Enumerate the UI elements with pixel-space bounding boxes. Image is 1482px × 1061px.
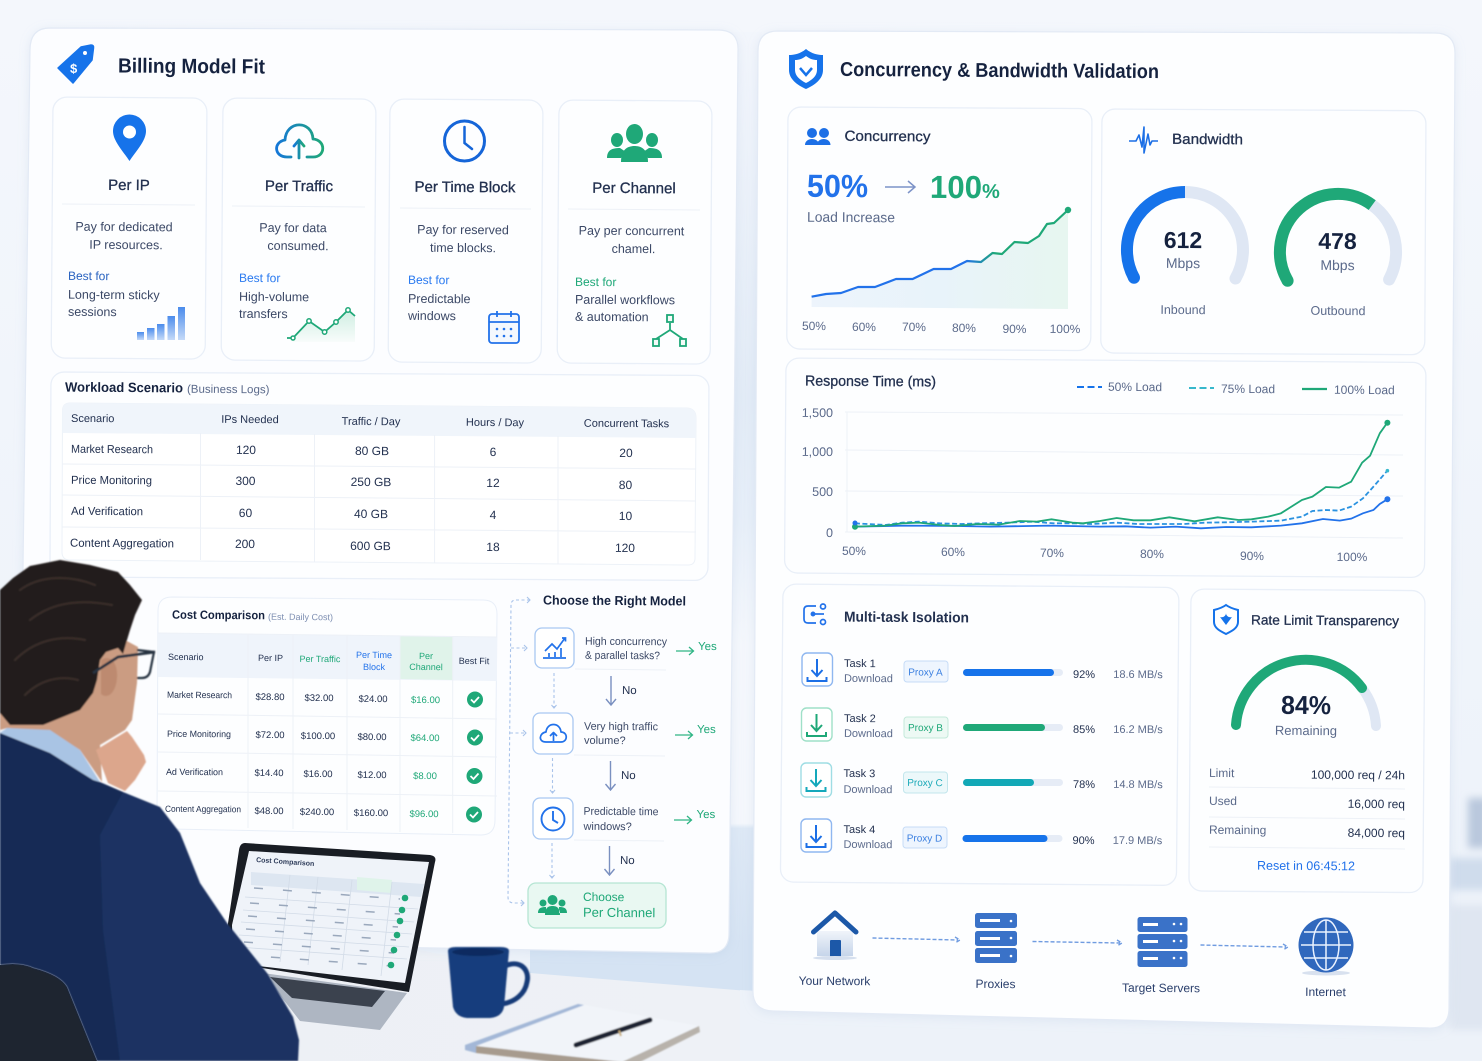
flowchart: choose the right model <box>508 593 717 928</box>
table: workload: 300 <box>235 474 256 488</box>
card: per channel: chamel. <box>612 242 655 256</box>
rate limit stats: Remaining <box>1209 823 1266 837</box>
rate limit stats <box>1209 766 1405 873</box>
row: task 3: Task 3 <box>843 768 875 780</box>
arrow <box>885 181 915 193</box>
step 2: volume? <box>584 735 626 747</box>
panel: cost comparison: $32.00 <box>304 693 334 704</box>
gauge: inbound <box>1127 192 1243 284</box>
card: per traffic <box>221 98 376 361</box>
step 1: Yes <box>698 641 717 653</box>
panel: cost comparison: $160.00 <box>354 808 388 819</box>
row: task 1 <box>802 653 1163 686</box>
panel: cost comparison: Best Fit <box>459 656 490 666</box>
card: per time block <box>388 99 543 363</box>
row: task 1: Proxy A <box>908 667 943 679</box>
panel: cost comparison: $100.00 <box>301 731 335 742</box>
card: per time block: windows <box>407 309 456 323</box>
panel: cost comparison: Per IP <box>258 653 283 663</box>
line chart: load increase: 60% <box>852 320 876 334</box>
axes <box>802 406 1403 564</box>
card: per traffic: Per Traffic <box>265 178 334 195</box>
card: rate limit transparency: Remaining <box>1275 723 1337 738</box>
table: workload: 200 <box>235 537 255 551</box>
panel: cost comparison: $72.00 <box>255 730 285 741</box>
panel: cost comparison: Block <box>363 662 386 672</box>
axes: 80% <box>1140 547 1164 561</box>
row: task 3: Download <box>843 784 892 796</box>
card: multi-task isolation: Multi-task Isolation <box>844 610 969 626</box>
rate limit stats: 100,000 req / 24h <box>1311 768 1405 782</box>
row: task 4 <box>801 819 1163 852</box>
rate limit stats: Reset in 06:45:12 <box>1257 859 1355 873</box>
network path diagram: Proxies <box>975 977 1016 991</box>
flowchart: choose the right model: No <box>621 770 636 782</box>
icon: house <box>813 913 857 960</box>
panel: cost comparison: $240.00 <box>300 807 334 818</box>
photo: notebook and pen <box>465 1004 700 1061</box>
panel: cost comparison: Cost Comparison <box>172 608 265 622</box>
axes: 60% <box>941 545 965 559</box>
step 1: & parallel tasks? <box>585 650 660 662</box>
axes: 70% <box>1040 546 1064 560</box>
step 3 <box>533 798 716 841</box>
blurred office backdrop <box>1450 798 1482 1030</box>
axes: 1,000 <box>802 445 833 459</box>
icon: isolation <box>804 604 826 624</box>
result: choose per channel: Choose <box>583 890 625 904</box>
icon: price tag: $ <box>70 61 78 76</box>
panel: billing model fit <box>0 28 738 953</box>
icon: globe <box>1298 918 1354 976</box>
card: bandwidth: Mbps <box>1320 257 1355 273</box>
icon: network branch <box>653 315 686 346</box>
card: bandwidth: Inbound <box>1160 303 1206 317</box>
card: rate limit transparency: 84% <box>1281 690 1331 720</box>
panel: cost comparison: Per Traffic <box>300 654 341 664</box>
photo: man <box>0 560 299 1061</box>
line chart: load increase: 70% <box>902 320 926 334</box>
row: task 3 <box>801 763 1163 797</box>
card: concurrency <box>787 107 1092 351</box>
gauge: outbound <box>1280 194 1396 287</box>
card: bandwidth: 612 <box>1164 227 1202 253</box>
panel: cost comparison: $8.00 <box>413 771 437 782</box>
card: bandwidth: 478 <box>1318 228 1357 254</box>
line chart: load increase: 90% <box>1002 322 1027 336</box>
card: rate limit transparency <box>1189 589 1425 893</box>
table: workload: 80 GB <box>355 444 389 458</box>
table: workload: 120 <box>615 541 635 555</box>
row: task 4: 17.9 MB/s <box>1113 835 1163 847</box>
card: bandwidth <box>1101 109 1426 355</box>
flowchart: choose the right model: No <box>622 685 637 697</box>
table: workload: Concurrent Tasks <box>584 418 670 430</box>
network path diagram: Internet <box>1305 985 1347 999</box>
rate limit stats: 16,000 req <box>1348 797 1405 811</box>
step 2: Yes <box>697 724 716 736</box>
heading: billing model fit: Billing Model Fit <box>118 54 265 79</box>
axes: 1,500 <box>802 406 833 420</box>
icon: calendar <box>489 311 519 343</box>
row: task 4: Task 4 <box>843 824 875 836</box>
icon: best fit checks <box>466 692 483 822</box>
icon: waveform <box>1129 127 1158 153</box>
card: per channel: & automation <box>575 310 649 324</box>
axes: 0 <box>826 526 833 540</box>
row: task 3: 78% <box>1073 779 1095 791</box>
row: task 2 <box>802 708 1163 741</box>
panel: cost comparison: Scenario <box>168 652 204 662</box>
row: task 1: 92% <box>1073 669 1095 681</box>
icon: users <box>805 128 830 145</box>
card: per ip: Per IP <box>108 177 150 194</box>
panel: cost comparison: $16.00 <box>303 769 333 780</box>
card: per ip: Pay for dedicated <box>75 220 173 234</box>
panel: cost comparison: Content Aggregation <box>165 804 241 814</box>
legend: 50% Load <box>1108 380 1162 394</box>
card: concurrency: % <box>982 181 1000 203</box>
network path diagram: Target Servers <box>1122 981 1200 995</box>
icon: cloud upload <box>277 125 323 158</box>
panel: cost comparison: (Est. Daily Cost) <box>268 612 333 622</box>
dashed return path <box>508 600 554 903</box>
icon: signal bars <box>137 307 185 340</box>
legend <box>1077 380 1395 397</box>
axes: 90% <box>1240 549 1264 563</box>
rate limit stats: Used <box>1209 794 1237 808</box>
icon: price tag <box>58 45 94 83</box>
axes: 500 <box>812 485 833 499</box>
photo: laptop <box>227 843 435 1030</box>
step 1 <box>535 628 717 670</box>
card: concurrency: 100 <box>930 169 982 205</box>
legend: 75% Load <box>1221 382 1275 396</box>
table: workload: 12 <box>486 476 500 490</box>
panel: workload scenario <box>50 372 709 580</box>
table: workload: 40 GB <box>354 507 388 521</box>
card: multi-task isolation <box>780 584 1179 885</box>
icon: clock <box>444 121 484 161</box>
icon: people group <box>607 124 662 162</box>
table: workload: 10 <box>619 509 633 523</box>
flowchart: choose the right model: Choose the Right Model <box>543 593 686 608</box>
table: workload: Hours / Day <box>466 417 525 429</box>
panel: cost comparison: $48.00 <box>254 806 284 817</box>
card: bandwidth: Outbound <box>1310 304 1366 318</box>
table: workload: IPs Needed <box>221 414 279 426</box>
row: task 2: Download <box>844 728 893 740</box>
icon: shield <box>789 49 823 89</box>
laptop screen text: Cost Comparison <box>256 857 315 868</box>
table: workload: 120 <box>236 443 256 457</box>
card: concurrency: Concurrency <box>844 129 931 145</box>
card: per ip: sessions <box>68 305 117 319</box>
table: workload <box>62 403 696 565</box>
line chart: load increase: 80% <box>952 321 976 335</box>
icon: shield check <box>1214 605 1238 634</box>
card: per ip <box>51 97 207 359</box>
heading: validation: Concurrency & Bandwidth Validation <box>840 59 1159 83</box>
panel: workload scenario: Workload Scenario <box>65 380 183 395</box>
result: choose per channel <box>528 883 666 928</box>
panel: cost comparison: Market Research <box>167 690 232 700</box>
row: task 3: 14.8 MB/s <box>1113 779 1163 791</box>
card: rate limit transparency: Rate Limit Transparency <box>1251 612 1399 629</box>
card: bandwidth: Mbps <box>1166 255 1200 271</box>
row: task 4: Proxy D <box>907 833 942 845</box>
card: per channel <box>557 100 712 364</box>
card: per traffic: consumed. <box>267 239 329 253</box>
card: per time block: Predictable <box>408 292 471 306</box>
gauge: remaining <box>1236 660 1376 726</box>
rate limit stats: 84,000 req <box>1348 826 1405 840</box>
card: response time chart <box>784 358 1426 577</box>
step 2 <box>533 713 716 756</box>
step 1: High concurrency <box>585 636 668 648</box>
panel: cost comparison: $16.00 <box>411 695 440 706</box>
table: workload: Content Aggregation <box>70 538 174 550</box>
panel: cost comparison: $96.00 <box>409 809 439 820</box>
table: workload: 60 <box>239 506 253 520</box>
table: workload: 80 <box>619 478 633 492</box>
card: per traffic: Best for <box>239 271 280 285</box>
panel: cost comparison: Price Monitoring <box>167 729 231 739</box>
row: task 4: 90% <box>1072 835 1095 847</box>
photo: chair <box>0 964 97 1061</box>
card: per traffic: Pay for data <box>259 221 327 235</box>
step 2: Very high traffic <box>584 721 659 733</box>
panel: cost comparison: Per Time <box>356 650 392 660</box>
step 3: Yes <box>696 809 716 821</box>
icon: traffic sparkline <box>287 308 355 342</box>
row: task 2: Task 2 <box>844 713 876 725</box>
row: task 1: 18.6 MB/s <box>1113 669 1163 681</box>
card: per time block: Pay for reserved <box>417 223 509 237</box>
panel: workload scenario: (Business Logs) <box>187 384 270 396</box>
table: workload: 18 <box>486 540 500 554</box>
panel: cost comparison: Channel <box>409 662 443 672</box>
arrow <box>1032 940 1122 946</box>
step 3: windows? <box>582 821 632 833</box>
card: concurrency: Load Increase <box>807 209 895 225</box>
axes: 50% <box>842 544 866 558</box>
network path diagram: Your Network <box>799 974 871 988</box>
card: per traffic: High-volume <box>239 290 309 304</box>
result: choose per channel: Per Channel <box>583 905 655 920</box>
card: response time chart: Response Time (ms) <box>805 374 936 390</box>
card: per time block: time blocks. <box>430 241 496 255</box>
table: workload: 250 GB <box>351 475 391 489</box>
line chart: load increase <box>802 207 1081 336</box>
panel: cost comparison: $12.00 <box>357 770 387 781</box>
arrow <box>872 937 960 943</box>
icon: glasses <box>93 650 155 678</box>
lines: response time <box>852 420 1390 530</box>
card: per traffic: transfers <box>239 307 288 321</box>
card: concurrency: 50% <box>807 168 868 204</box>
step 3: Predictable time <box>583 806 659 818</box>
table: workload: Ad Verification <box>71 506 143 518</box>
row: task 1: Task 1 <box>844 658 876 670</box>
icon: location pin <box>113 114 146 161</box>
card: bandwidth: Bandwidth <box>1172 132 1243 148</box>
panel: cost comparison: $24.00 <box>358 694 388 705</box>
rate limit stats: Limit <box>1209 766 1235 780</box>
row: task 4: Download <box>843 839 892 851</box>
card: per time block: Best for <box>408 273 449 287</box>
table: workload: 4 <box>490 508 497 522</box>
row: task 2: 85% <box>1073 724 1095 736</box>
table: workload: Market Research <box>71 444 153 456</box>
panel: cost comparison <box>157 597 497 835</box>
panel: cost comparison: $64.00 <box>410 733 440 744</box>
arrow <box>1200 944 1288 950</box>
axes: 100% <box>1337 550 1368 564</box>
card: per channel: Per Channel <box>592 180 676 197</box>
legend: 100% Load <box>1334 383 1395 397</box>
line chart: load increase: 100% <box>1050 322 1081 336</box>
photo: coffee mug <box>448 947 528 1018</box>
card: per ip: IP resources. <box>89 238 163 252</box>
row: task 2: 16.2 MB/s <box>1113 724 1163 736</box>
card: per channel: Best for <box>575 275 616 289</box>
icon: target servers <box>1138 917 1188 967</box>
table: workload: Traffic / Day <box>342 416 401 428</box>
card: per ip: Long-term sticky <box>68 288 160 302</box>
panel: cost comparison: $28.80 <box>255 692 285 703</box>
table: workload: Price Monitoring <box>71 475 152 487</box>
panel: cost comparison: $14.40 <box>254 768 284 779</box>
card: per channel: Parallel workflows <box>575 293 675 307</box>
card: per time block: Per Time Block <box>415 179 516 196</box>
panel: cost comparison: $80.00 <box>357 732 387 743</box>
network path diagram <box>799 913 1354 999</box>
panel: concurrency and bandwidth validation <box>753 31 1455 1028</box>
table: workload: 600 GB <box>350 539 391 553</box>
table: workload: 20 <box>619 446 633 460</box>
card: per channel: Pay per concurrent <box>579 224 685 238</box>
line chart: load increase: 50% <box>802 319 826 333</box>
row: task 3: Proxy C <box>907 778 943 789</box>
table: workload: 6 <box>490 445 497 459</box>
card: per ip: Best for <box>68 269 109 283</box>
panel: cost comparison: Ad Verification <box>166 767 223 777</box>
row: task 1: Download <box>844 673 893 685</box>
icon: proxies <box>975 913 1017 963</box>
row: task 2: Proxy B <box>908 723 943 734</box>
table: workload: Scenario <box>71 413 114 425</box>
flowchart: choose the right model: No <box>620 855 635 867</box>
panel: cost comparison: Per <box>419 651 433 661</box>
